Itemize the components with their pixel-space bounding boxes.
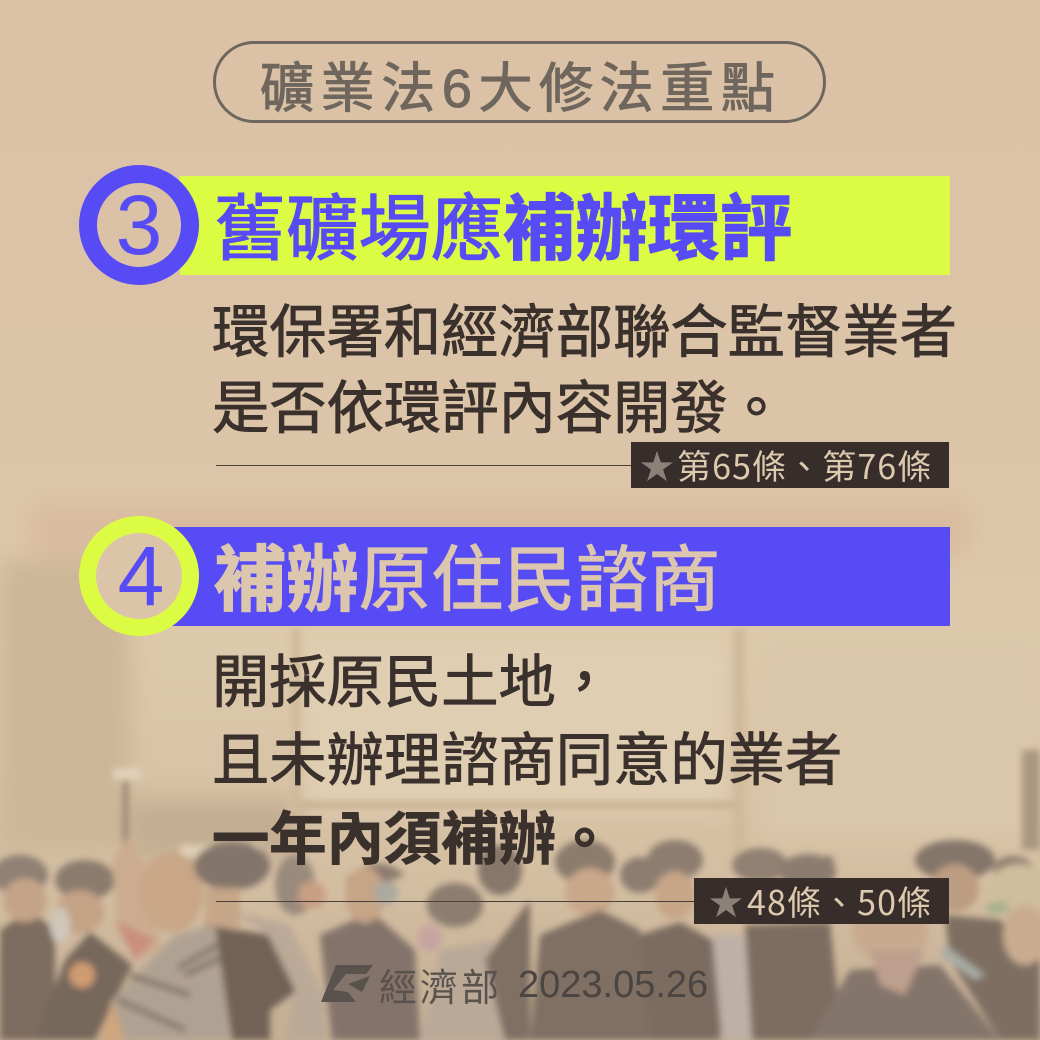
- section 3 article tag: ★: [640, 440, 674, 489]
- section 4 divider: [216, 901, 696, 902]
- badge 4: 4: [118, 529, 164, 623]
- section 3 divider: [216, 465, 632, 466]
- section 4 body text line 3: 一年內須補辦。: [212, 793, 613, 876]
- hair and dark shirt: [194, 842, 270, 890]
- section 4 article tag: 48條、50條: [747, 876, 932, 925]
- footer ministry name: 經濟部: [379, 957, 502, 1012]
- right center people: [555, 840, 615, 884]
- section 4 banner: [170, 527, 950, 626]
- title: 礦業法6大修法重點: [260, 44, 781, 123]
- section 4 body text line 2: 且未辦理諮商同意的業者: [212, 714, 842, 797]
- footer logo: [321, 965, 373, 1002]
- section 3 heading: 舊礦場應補辦環評: [214, 170, 792, 275]
- section 4 heading: 補辦原住民諮商: [214, 521, 721, 626]
- section 4 article tag: [694, 878, 949, 924]
- badge 3: [79, 165, 199, 285]
- badge 3: 3: [116, 178, 162, 272]
- section 4 article tag: ★: [709, 876, 743, 925]
- section 3 body text line 2: 是否依環評內容開發。: [212, 362, 785, 445]
- footer date: 2023.05.26: [518, 964, 708, 1006]
- section 3 article tag: 第65條、第76條: [677, 440, 932, 489]
- section 3 banner: [180, 176, 950, 275]
- badge 4: [79, 516, 199, 636]
- far left people: [0, 910, 55, 1040]
- section 4 body text: 開採原民土地，: [212, 636, 613, 719]
- central people: [275, 855, 315, 915]
- title pill: [213, 41, 826, 123]
- section 3 body text: 環保署和經濟部聯合監督業者: [212, 286, 957, 369]
- striped shirt: [112, 925, 232, 1040]
